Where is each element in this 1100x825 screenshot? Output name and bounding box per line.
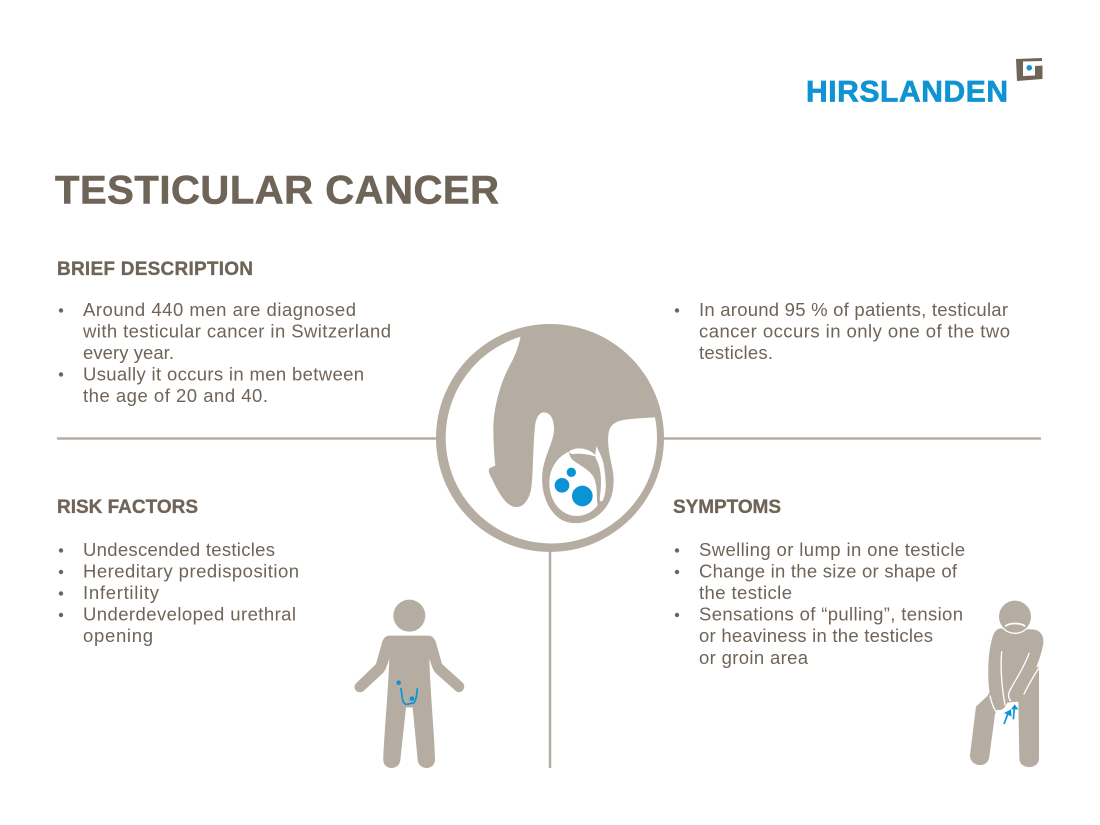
central anatomy illustration <box>436 324 664 552</box>
text block: risk factors list <box>59 539 299 646</box>
text block: brief description left: Usually it occurs in men between <box>83 364 364 384</box>
text block: brief description left: every year. <box>83 342 174 363</box>
mouth <box>1006 623 1025 626</box>
text block: brief description left: with testicular cancer in Switzerland <box>82 320 391 342</box>
text block: brief description right: In around 95 % of patients, testicular <box>699 299 1008 320</box>
arm separators <box>990 652 1039 712</box>
head <box>393 600 425 632</box>
text block: symptoms list: or heaviness in the testicles <box>699 625 933 646</box>
text block: symptoms list: Swelling or lump in one testicle <box>699 539 965 560</box>
text block: symptoms list: Change in the size or shape of <box>699 560 958 582</box>
heading: brief description: BRIEF DESCRIPTION <box>57 259 253 280</box>
text block: symptoms list: or groin area <box>699 647 809 668</box>
torso and arms <box>988 628 1043 710</box>
pain arrows <box>1004 704 1018 724</box>
text block: symptoms list: Sensations of “pulling”, tension <box>699 604 963 624</box>
text block: risk factors list: Hereditary predisposition <box>83 560 299 582</box>
icon: standing man <box>355 600 464 768</box>
body <box>355 636 464 768</box>
text block: brief description left: Around 440 men are diagnosed <box>83 299 356 320</box>
text block: brief description right <box>675 299 1010 363</box>
text block: risk factors list: Undescended testicles <box>83 539 275 560</box>
title: TESTICULAR CANCER <box>55 168 499 212</box>
heading: risk factors: RISK FACTORS <box>57 497 198 518</box>
text block: risk factors list: Underdeveloped urethral <box>83 604 296 624</box>
legs <box>970 667 1039 767</box>
icon: man holding groin <box>970 600 1043 767</box>
text block: brief description left: the age of 20 and 40. <box>83 385 268 406</box>
text block: brief description right: cancer occurs in only one of the two <box>699 320 1010 342</box>
heading: symptoms: SYMPTOMS <box>673 497 781 518</box>
text block: brief description left <box>59 299 391 406</box>
logo icon <box>1016 58 1042 81</box>
epididymis top crescent <box>569 448 597 457</box>
circle disc and ring <box>436 324 664 552</box>
text block: brief description right: testicles. <box>699 342 773 363</box>
testicle interior <box>549 452 598 516</box>
text block: risk factors list: opening <box>83 625 153 646</box>
groin highlight <box>396 680 417 704</box>
text block: symptoms list <box>675 539 965 668</box>
head <box>998 600 1032 633</box>
logo: Hirslanden <box>806 58 1042 108</box>
epididymis side stripe <box>595 446 606 501</box>
white background inside ring <box>446 337 657 543</box>
text block: risk factors list: Infertility <box>83 582 160 603</box>
text block: symptoms list: the testicle <box>699 582 792 603</box>
tumour dots <box>555 468 593 506</box>
logo wordmark: HIRSLANDEN <box>806 76 1008 108</box>
